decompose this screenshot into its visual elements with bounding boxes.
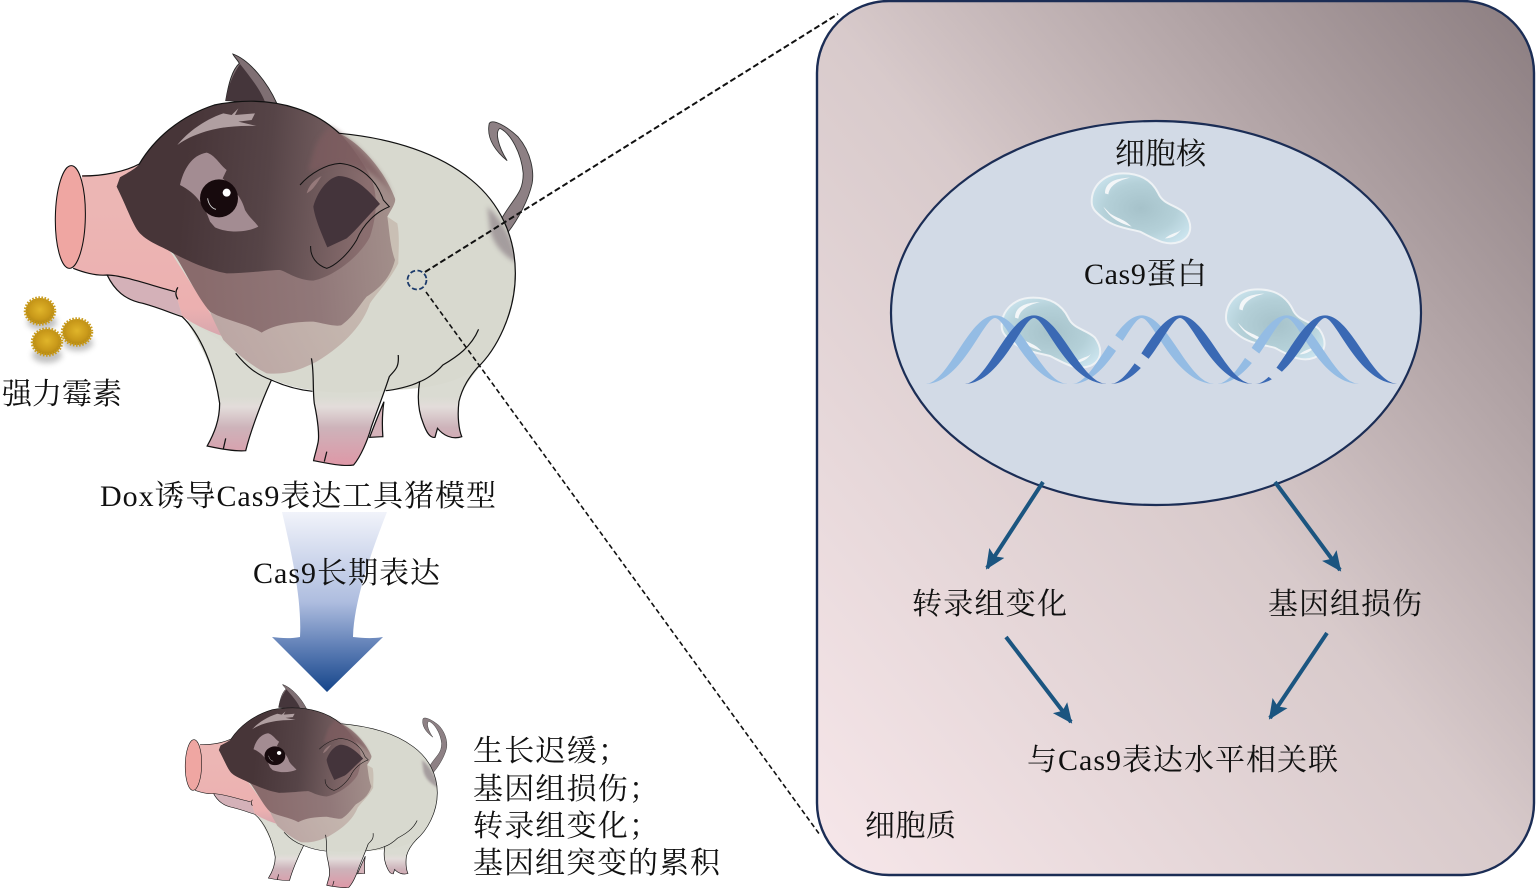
- label: doxycycline: 强力霉素: [2, 378, 122, 411]
- dashed line: zoom lower: [426, 292, 820, 835]
- arrow: genome damage to correlation: [1270, 633, 1327, 718]
- arrow: transcriptome to correlation: [1006, 637, 1071, 722]
- DNA dark strand: [964, 315, 1398, 384]
- nucleus: [891, 121, 1421, 505]
- ear light patch: [307, 176, 322, 193]
- mauve top-right blush: [308, 127, 393, 198]
- text block: outcomes: 基因组突变的累积: [473, 847, 721, 880]
- icon: Cas9 protein on DNA right: [1226, 289, 1325, 359]
- hair highlight: [177, 108, 257, 145]
- panel: cell cytoplasm: [817, 1, 1534, 875]
- label: cytoplasm: 细胞质: [865, 810, 956, 843]
- label: nucleus: 细胞核: [1115, 138, 1207, 171]
- jaw: [107, 275, 182, 316]
- dashed line: zoom upper: [425, 14, 838, 272]
- arrow: nucleus to transcriptome: [987, 482, 1043, 568]
- icon: Cas9 proteins and DNA double helix: [925, 173, 1398, 384]
- head patches: [117, 101, 399, 374]
- label: pig model: Dox诱导Cas9表达工具猪模型: [100, 480, 496, 513]
- DNA light strand: [925, 315, 1360, 384]
- label: Cas9 protein: Cas9蛋白: [1084, 258, 1207, 291]
- icon: free Cas9 protein: [1092, 173, 1190, 243]
- tan patch: [210, 217, 399, 374]
- eye patch: [180, 153, 258, 232]
- text block: outcomes: 基因组损伤；: [473, 773, 659, 806]
- text block: outcomes: 转录组变化；: [473, 810, 659, 843]
- snout pink: [73, 164, 229, 338]
- arrow: nucleus to genome damage: [1275, 482, 1340, 570]
- far leg: [370, 402, 384, 437]
- icon: sampling circle: [408, 270, 426, 290]
- legs fill: [186, 320, 479, 465]
- big down arrow: [272, 512, 387, 692]
- snout disc: [54, 165, 86, 269]
- label: genome damage: 基因组损伤: [1268, 588, 1422, 621]
- rump shading: [487, 207, 518, 263]
- text block: outcomes: 生长迟缓；: [473, 735, 628, 768]
- eye: [200, 179, 238, 217]
- dark head patch: [117, 101, 376, 281]
- ear inner: [313, 176, 380, 247]
- icon: small pig: [185, 684, 447, 888]
- icon: Cas9 protein on DNA left: [1002, 298, 1100, 368]
- icon: doxycycline pills: [26, 298, 93, 363]
- tail: [489, 122, 533, 233]
- mauve patch: [117, 101, 395, 333]
- label: transcriptome change: 转录组变化: [912, 588, 1067, 621]
- ear back: [226, 54, 277, 103]
- label: long-term expression: Cas9长期表达: [253, 557, 440, 590]
- label: correlation: 与Cas9表达水平相关联: [1027, 744, 1338, 777]
- body base: [73, 101, 515, 393]
- outlines: [73, 101, 515, 465]
- icon: large pig: [54, 54, 533, 465]
- ear outline: [300, 163, 389, 268]
- text block: outcomes: [473, 735, 721, 880]
